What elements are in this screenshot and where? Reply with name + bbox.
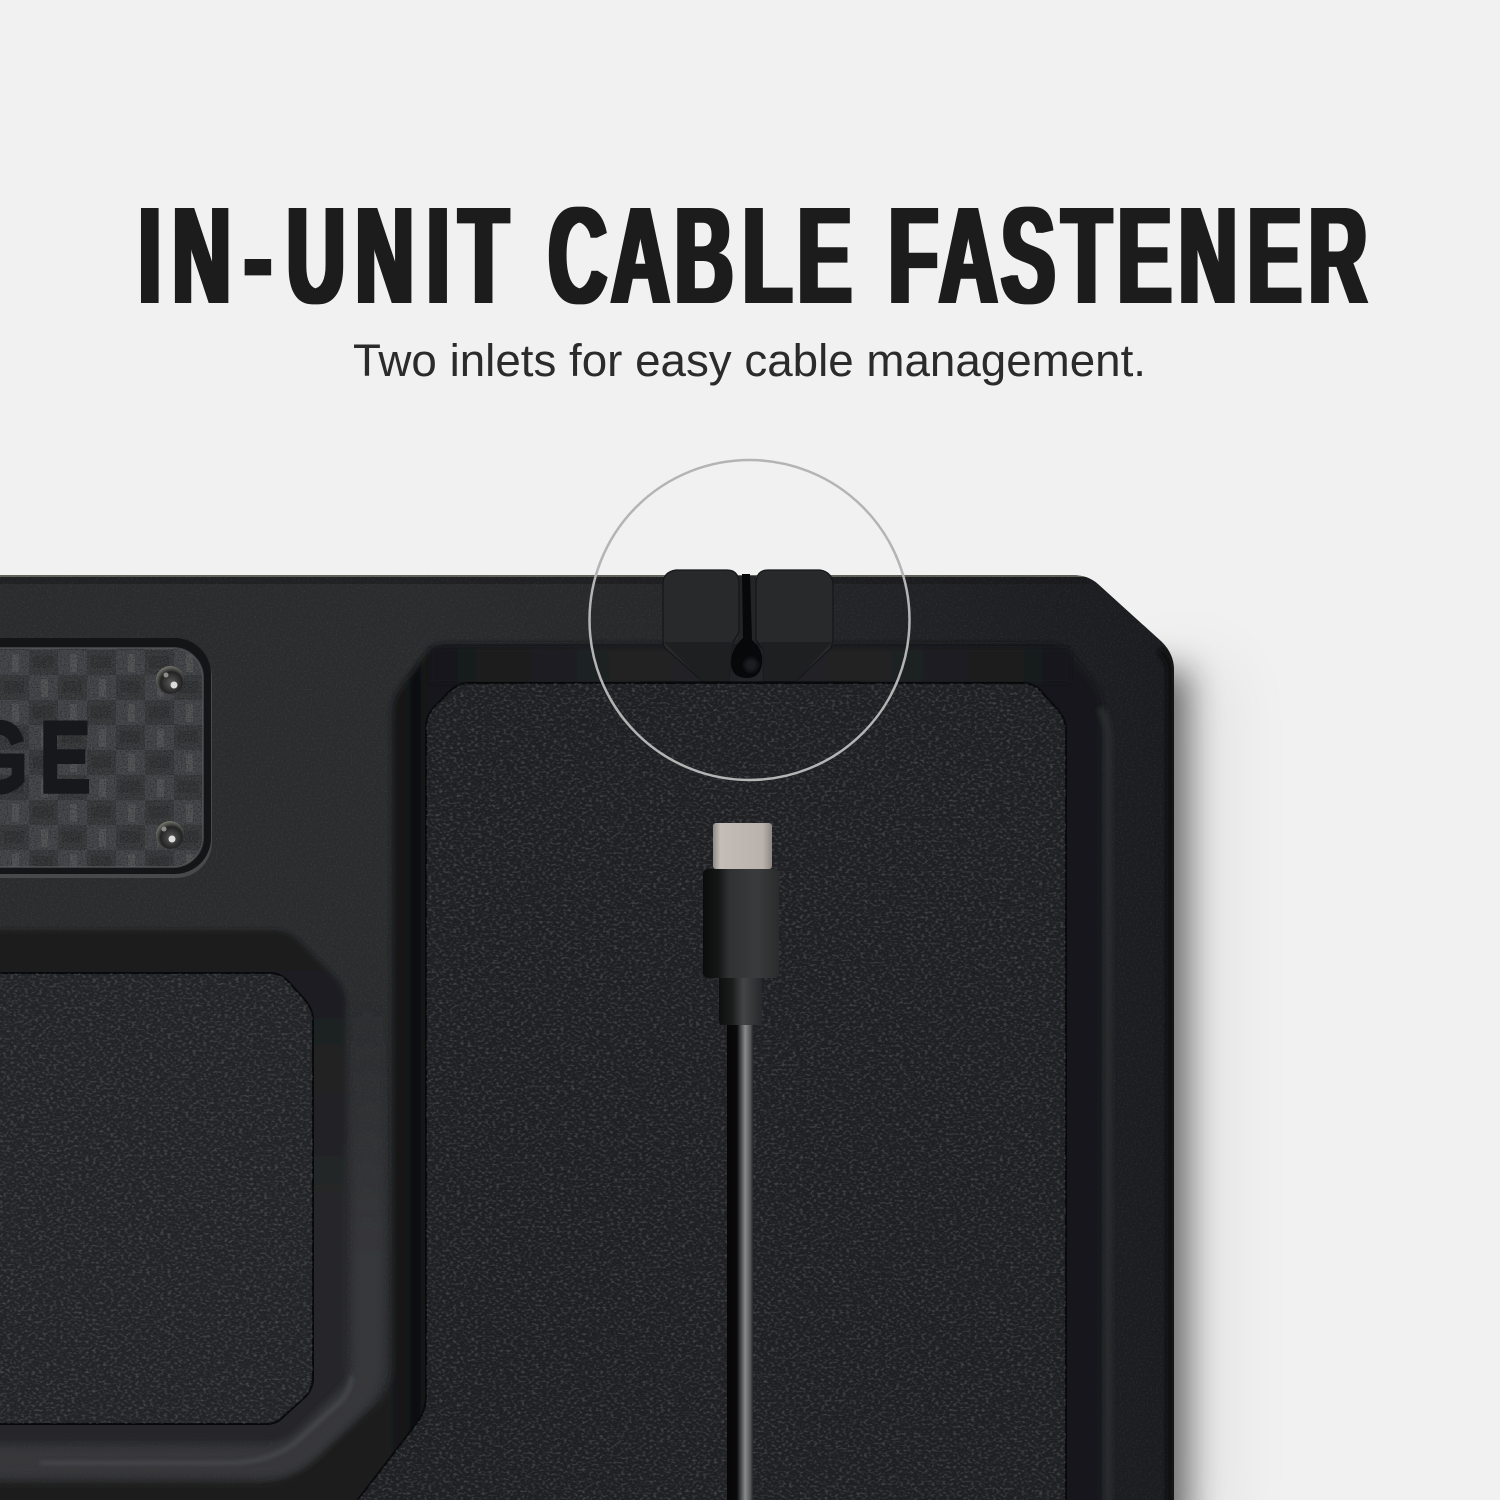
gap between tabs	[738, 576, 756, 682]
left tab	[663, 570, 739, 681]
left recess wall	[0, 930, 346, 1442]
title: FASTENER	[889, 178, 1367, 332]
infographic canvas	[0, 206, 1368, 1500]
leather shadow line	[640, 682, 860, 684]
cable fastener clip	[640, 570, 860, 684]
leather pad: right	[340, 680, 1080, 1500]
right side ridge	[1100, 708, 1108, 1500]
screw: bottom	[156, 821, 184, 849]
product: organiser tray	[0, 570, 1230, 1500]
right edge	[1160, 650, 1170, 1500]
cable cord	[727, 1022, 753, 1500]
connector boot	[703, 869, 779, 978]
USB-C cable	[703, 823, 779, 1500]
title	[139, 178, 1367, 332]
ridge between recesses	[0, 1166, 382, 1476]
carbon fibre badge	[0, 638, 212, 878]
right recess wall	[0, 644, 1102, 1500]
strain relief	[719, 976, 762, 1025]
title: IN-UNIT	[139, 178, 508, 332]
fastener slot	[731, 574, 762, 678]
tray body	[0, 575, 1174, 1500]
metal plug	[713, 823, 772, 869]
top recess band	[430, 648, 1070, 683]
leather pad: left	[0, 970, 320, 1430]
body detail	[0, 575, 1180, 1500]
right tab	[756, 570, 833, 681]
title: CABLE	[549, 178, 852, 332]
drop shadow	[1130, 660, 1230, 1500]
callout circle	[590, 460, 910, 780]
subtitle: Two inlets for easy cable management.	[353, 335, 1146, 386]
screw: top	[156, 666, 184, 694]
